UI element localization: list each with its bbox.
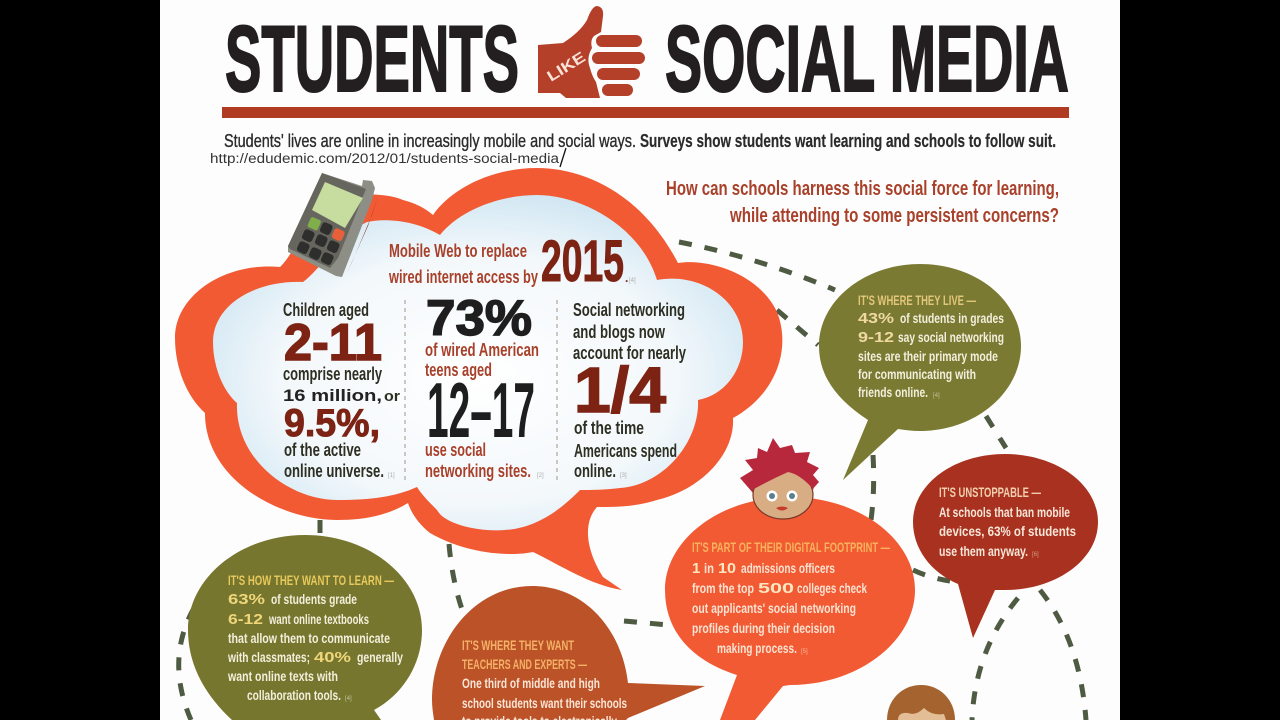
bubble: how they want to learn: collaboration tools. — [247, 687, 341, 703]
mobile web headline: [4] — [629, 278, 636, 284]
cloud inner — [213, 195, 743, 530]
column: children: [1] — [388, 473, 395, 479]
column: time online — [573, 300, 686, 481]
bubble: digital footprint: making process. — [717, 640, 797, 656]
column: children — [283, 300, 400, 481]
mobile web headline: 2015 — [541, 229, 624, 294]
column: time online: [3] — [620, 473, 627, 479]
column: teens: networking sites. — [425, 461, 531, 481]
title — [225, 6, 1069, 111]
column: time online: account for nearly — [573, 343, 686, 363]
column: children: Children aged — [283, 300, 369, 320]
bubble: how they want to learn: with classmates; — [227, 649, 310, 665]
bubble: unstoppable: At schools that ban mobile — [939, 504, 1070, 520]
bubble: how they want to learn: 40% — [314, 649, 351, 666]
bubble: how they want to learn: [4] — [345, 696, 352, 702]
mobile web headline: wired internet access by — [388, 267, 538, 287]
column: children: 9.5%, — [284, 402, 380, 445]
bubble: where they live: 43% — [858, 310, 894, 327]
subtitle — [224, 131, 1056, 151]
column: teens: of wired American — [425, 340, 539, 360]
bubble: unstoppable: use them anyway. — [939, 543, 1028, 559]
question heading — [666, 178, 1059, 227]
bubble: unstoppable: [6] — [1032, 552, 1039, 558]
bubble: digital footprint: IT'S PART OF THEIR DIGITAL FOOTPRINT — — [692, 539, 890, 555]
title rule — [222, 107, 1069, 118]
column: children: comprise nearly — [283, 364, 382, 384]
bubble: unstoppable — [913, 454, 1098, 638]
icon: brown-haired character — [887, 685, 955, 720]
bubble: how they want to learn: of students grade — [271, 591, 357, 607]
mobile web headline — [388, 229, 636, 294]
source url: http://edudemic.com/2012/01/students-social-media — [210, 151, 560, 166]
page background — [160, 0, 1120, 720]
bubble: teachers and experts: One third of middle and high — [462, 675, 600, 691]
bubble: teachers and experts: IT'S WHERE THEY WANT — [462, 637, 574, 653]
bubble: digital footprint: out applicants' social networking — [692, 600, 856, 616]
bubble: where they live: for communicating with — [858, 366, 976, 382]
column: time online: 1/4 — [574, 354, 666, 426]
column: time online: Americans spend — [574, 441, 677, 461]
bubble: digital footprint: 10 — [718, 560, 736, 577]
bubble: how they want to learn: that allow them to communicate — [228, 630, 390, 646]
source url — [210, 148, 566, 167]
column: teens — [425, 290, 544, 481]
bubble: where they live: 9-12 — [858, 329, 894, 346]
bubble: how they want to learn — [188, 535, 422, 720]
bubble: where they live: friends online. — [858, 384, 928, 400]
subtitle: Students' lives are online in increasingly mobile and social ways. — [224, 131, 636, 151]
bubble: how they want to learn: want online textbooks — [268, 611, 369, 627]
question heading: How can schools harness this social force for learning, — [666, 178, 1059, 200]
column: children: online universe. — [284, 461, 384, 481]
column: teens: 73% — [426, 290, 532, 346]
column: children: or — [384, 388, 400, 405]
bubble: where they live: IT'S WHERE THEY LIVE — — [858, 292, 976, 308]
panel: main cloud — [175, 168, 782, 590]
bubble: where they live: of students in grades — [900, 310, 1004, 326]
column: teens: teens aged — [425, 360, 492, 380]
bubble: digital footprint: colleges check — [797, 580, 867, 596]
mobile web headline: Mobile Web to replace — [389, 241, 527, 261]
column: teens: [2] — [537, 473, 544, 479]
bubble: how they want to learn: 6-12 — [228, 611, 263, 628]
bubble: digital footprint: 1 — [692, 560, 700, 577]
subtitle: Surveys show students want learning and schools to follow suit. — [640, 131, 1056, 151]
bubble: digital footprint: in — [704, 560, 714, 576]
bubble: teachers and experts: TEACHERS AND EXPERTS — — [462, 656, 587, 672]
column: time online: online. — [574, 461, 616, 481]
bubble: where they live: say social networking — [898, 329, 1004, 345]
bubble: digital footprint: profiles during their decision — [692, 620, 835, 636]
bubble: digital footprint: from the top — [692, 580, 754, 596]
icon: thumbs up — [538, 6, 645, 98]
column: children: 16 million, — [283, 386, 382, 405]
cloud outline — [175, 168, 782, 590]
column: children: of the active — [284, 440, 361, 460]
column: time online: Social networking — [573, 300, 685, 320]
column: children: 2-11 — [284, 314, 382, 372]
column dividers — [405, 300, 557, 484]
bubble: how they want to learn: 63% — [228, 591, 265, 608]
column: teens: use social — [425, 440, 486, 460]
bubble: teachers and experts: school students want their schools — [462, 695, 627, 711]
bubble: digital footprint: 500 — [758, 580, 794, 597]
bubble: where they live: [4] — [933, 393, 940, 399]
bubble: teachers and experts — [432, 586, 705, 720]
dashed connectors — [179, 242, 1086, 720]
icon: thumbs up: LIKE — [544, 49, 589, 85]
bubble: unstoppable: devices, 63% of students — [939, 523, 1076, 539]
bubble: how they want to learn: want online texts with — [227, 668, 338, 684]
icon: red-haired character — [740, 438, 819, 519]
mobile web headline: . — [625, 271, 628, 285]
icon: mobile phone — [288, 173, 378, 277]
column: time online: of the time — [574, 418, 644, 438]
title: STUDENTS — [225, 6, 519, 111]
bubble: digital footprint: admissions officers — [741, 560, 835, 576]
column: teens: 12–17 — [427, 366, 535, 454]
bubble: how they want to learn: generally — [357, 649, 403, 665]
question heading: while attending to some persistent concerns? — [729, 205, 1059, 227]
bubble: where they live — [819, 264, 1021, 480]
bubble: where they live: sites are their primary mode — [858, 348, 998, 364]
column: time online: and blogs now — [573, 322, 666, 342]
bubble: how they want to learn: IT'S HOW THEY WANT TO LEARN — — [228, 572, 394, 588]
bubble: unstoppable: IT'S UNSTOPPABLE — — [939, 484, 1041, 500]
bubble: digital footprint: [5] — [801, 649, 808, 655]
bubble: digital footprint — [665, 497, 915, 720]
